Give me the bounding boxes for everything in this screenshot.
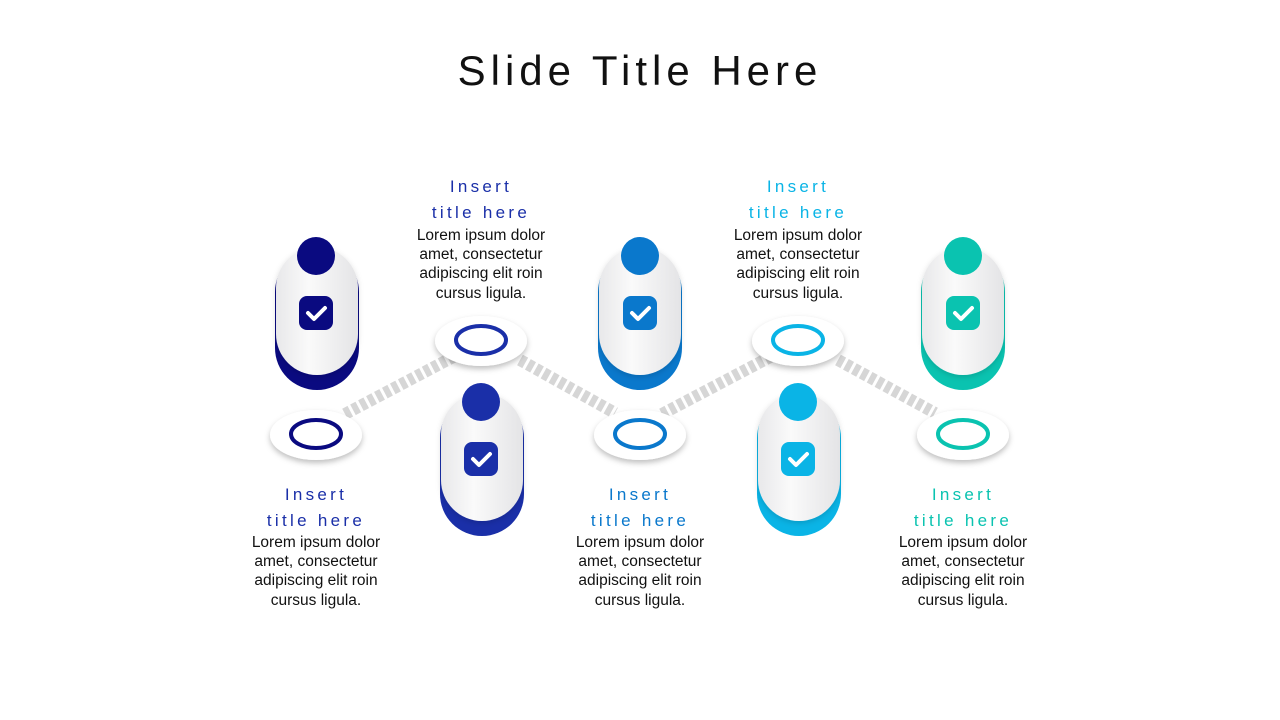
text: step 1: amet, consectetur [254, 553, 378, 570]
text: step 2: adipiscing elit roin [419, 265, 543, 282]
text: step 1: cursus ligula. [271, 592, 361, 609]
text: step 1: adipiscing elit roin [254, 572, 378, 589]
text: step 4: adipiscing elit roin [736, 265, 860, 282]
text: step 5: Lorem ipsum dolor [899, 534, 1027, 551]
text: step 4: Lorem ipsum dolor [734, 227, 862, 244]
text: step 3: cursus ligula. [595, 592, 685, 609]
arrows: connecting paths [345, 356, 935, 414]
step 3 disc [594, 410, 686, 460]
text: step 1: Insert [285, 485, 347, 504]
text: step 5: cursus ligula. [918, 592, 1008, 609]
text: step 3: Lorem ipsum dolor [576, 534, 704, 551]
text: step 2: amet, consectetur [419, 246, 543, 263]
text: step 2: Insert [450, 177, 512, 196]
text: step 4: cursus ligula. [753, 285, 843, 302]
text: step 1 [252, 485, 380, 609]
text: step 5: amet, consectetur [901, 553, 1025, 570]
step 1 pill [275, 237, 359, 390]
text: step 3: adipiscing elit roin [578, 572, 702, 589]
text: step 1: title here [267, 511, 365, 530]
text: step 3: Insert [609, 485, 671, 504]
text: step 3 [576, 485, 704, 609]
text: step 5 [899, 485, 1027, 609]
text: step 2: Lorem ipsum dolor [417, 227, 545, 244]
text: step 4: title here [749, 203, 847, 222]
step 3 pill [598, 237, 682, 390]
step 1 disc [270, 410, 362, 460]
text: step 2 [417, 177, 545, 302]
text: step 4 [734, 177, 862, 302]
text: step 5: Insert [932, 485, 994, 504]
step 2 disc [435, 316, 527, 366]
step 5 pill [921, 237, 1005, 390]
text: step 3: amet, consectetur [578, 553, 702, 570]
text: step 2: title here [432, 203, 530, 222]
text: step 3: title here [591, 511, 689, 530]
text: step 5: title here [914, 511, 1012, 530]
text: step 4: amet, consectetur [736, 246, 860, 263]
text: step 1: Lorem ipsum dolor [252, 534, 380, 551]
text: step 2: cursus ligula. [436, 285, 526, 302]
step 2 pill [440, 383, 524, 536]
step 4 disc [752, 316, 844, 366]
text: step 5: adipiscing elit roin [901, 572, 1025, 589]
text: step 4: Insert [767, 177, 829, 196]
step 4 pill [757, 383, 841, 536]
title: Slide Title Here [458, 47, 822, 94]
step 5 disc [917, 410, 1009, 460]
